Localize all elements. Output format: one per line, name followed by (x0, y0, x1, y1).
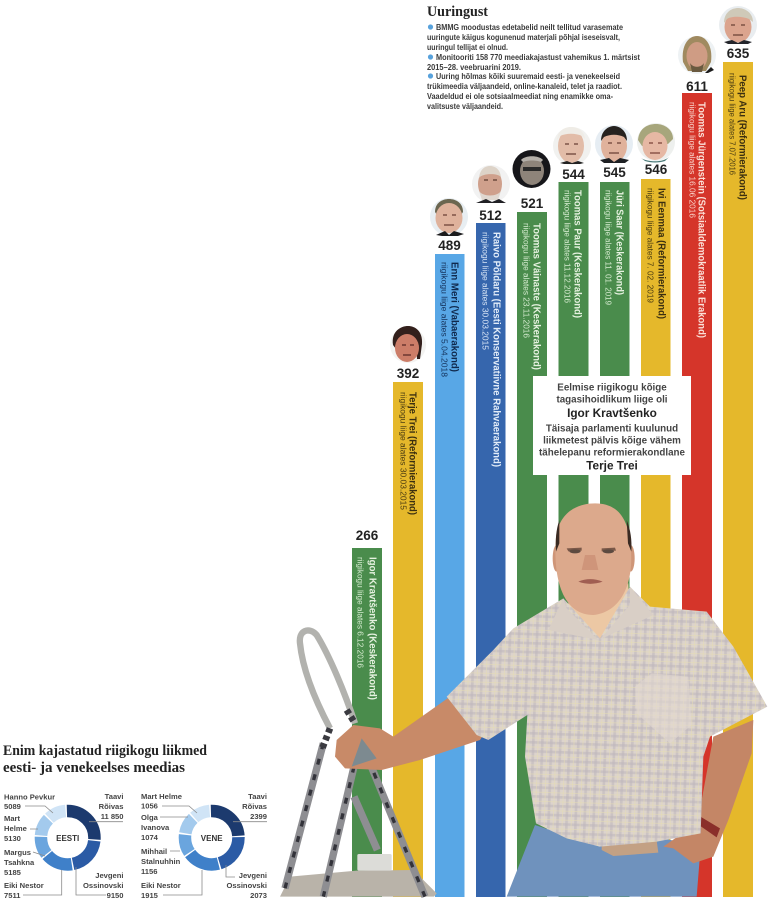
portrait: Enn Meri (430, 198, 468, 236)
heading: Uuringust: Uuringust (427, 4, 488, 20)
donut chart: Russian media: Stalnuhhin (141, 857, 181, 866)
neck (567, 583, 630, 640)
value: 521: 521 (521, 196, 544, 211)
bar: Terje Trei: Terje Trei (Reformierakond) (406, 392, 418, 515)
text block: Uuringust: trükimeedia väljaandeid, online-kanaleid, telet ja raadiot. (427, 82, 622, 91)
bar: Ivi Eenmaa: Ivi Eenmaa (Reformierakond) (656, 188, 666, 319)
donut chart: Russian media: 1915 (141, 891, 159, 900)
text block: Uuringust: BMMG moodustas edetabelid neilt tellitud varasemate (436, 23, 623, 32)
shirt pocket (635, 673, 692, 743)
bar: Enn Meri: riigikogu liige alates 5.04.2018 (440, 262, 448, 377)
donut chart: Estonian media: 5089 (4, 802, 21, 811)
head (553, 503, 635, 615)
donut chart: Estonian media: Margus (4, 848, 31, 857)
donut chart: Russian media: 1056 (141, 802, 158, 810)
donut chart: Estonian media: 5185 (4, 868, 22, 877)
donut chart: Russian media: Ossinovski (226, 881, 267, 890)
portrait: Peep Aru (719, 6, 757, 44)
donut chart: Russian media: Eiki Nestor (141, 881, 181, 890)
portrait: Raivo Põldaru (472, 165, 510, 203)
donut chart: Estonian media: Eiki Nestor (4, 881, 44, 890)
bar: Terje Trei: riigikogu liige alates 30.03.2015 (398, 392, 408, 510)
bar: Toomas Paur: Toomas Paur (Keskerakond) (572, 190, 582, 318)
donut chart: Estonian media: Helme (4, 824, 27, 833)
bar: Enn Meri (435, 254, 464, 897)
bar: Jüri Saar: Jüri Saar (Keskerakond) (614, 190, 624, 295)
right arm (663, 720, 753, 863)
donut chart: Estonian media: 9150 (107, 891, 124, 900)
value: 544: 544 (562, 167, 585, 182)
bar: Toomas Paur (558, 182, 588, 897)
portrait: Toomas Paur (553, 127, 591, 165)
watch (693, 813, 720, 837)
heading: most covered members: Enim kajastatud riigikogu liikmed (3, 743, 208, 759)
callout: Kravtšenko and Trei: Eelmise riigikogu kõige (557, 382, 667, 394)
bar: Igor Kravtšenko (352, 548, 382, 897)
bar: Jüri Saar (600, 182, 630, 897)
bar: Toomas Väinaste (517, 212, 547, 897)
text block: Uuringust: 2015–28. veebruarini 2019. (427, 63, 521, 72)
portrait: Toomas Väinaste (512, 150, 550, 188)
donut chart: Russian media: 2399 (250, 812, 267, 821)
donut chart: Russian media: Mihhail (141, 847, 167, 856)
belt (602, 841, 658, 856)
text block: Uuringust (427, 4, 640, 111)
bar: Jüri Saar: riigikogu liige alates 11. 01. 2019 (604, 190, 612, 305)
callout: Kravtšenko and Trei: liikmetest pälvis kõige vähem (543, 436, 681, 446)
heading: most covered members: eesti- ja venekeelses meedias (3, 760, 185, 776)
value: 266: 266 (356, 528, 379, 543)
text block: Uuringust: uuringute käigus kogunenud materjali põhjal iseseisvalt, (427, 33, 620, 42)
donut chart: Russian media: 1074 (141, 833, 159, 842)
donut chart: Russian media: Olga (141, 813, 159, 822)
bar: Igor Kravtšenko: riigikogu liige alates 6.12.2016 (356, 557, 364, 668)
value: 635: 635 (727, 46, 750, 61)
left arm (335, 697, 493, 770)
donut chart: Russian media: Mart Helme (141, 792, 182, 801)
bar: Igor Kravtšenko: Igor Kravtšenko (Keskerakond) (366, 557, 378, 700)
bar: Toomas Jürgenstein (682, 93, 712, 897)
bar: Enn Meri: Enn Meri (Vabaerakond) (448, 262, 460, 372)
heading: most covered members (3, 743, 208, 776)
bar: Raivo Põldaru: riigikogu liige alates 30.03.2015 (480, 232, 490, 350)
callout: Kravtšenko and Trei: tagasihoidlikum liige oli (556, 394, 668, 406)
stepladder (280, 630, 437, 897)
value: 545: 545 (603, 165, 626, 180)
donut chart: Russian media (141, 792, 267, 900)
bar: Ivi Eenmaa: riigikogu liige alates 7. 02. 2019 (646, 188, 654, 303)
donut chart: Russian media: VENE (201, 834, 223, 843)
donut chart: Estonian media: Tsahkna (4, 858, 35, 867)
callout: Kravtšenko and Trei: Täisaja parlamenti kuulunud (546, 424, 678, 434)
donut chart: Estonian media: 11 850 (101, 812, 124, 821)
text block: Uuringust: Vaadeldud ei ole sotsiaalmeediat ning enamikke oma- (427, 92, 613, 101)
donut chart: Estonian media: 5130 (4, 834, 21, 843)
bar: Toomas Väinaste: Toomas Väinaste (Keskerakond) (530, 223, 542, 370)
text block: Uuringust: Monitooriti 158 770 meediakajastust vahemikus 1. märtsist (436, 53, 640, 62)
donut chart: Estonian media: Hanno Pevkur (4, 792, 55, 802)
text block: Uuringust: Uuring hõlmas kõiki suuremaid eesti- ja venekeelseid (436, 72, 620, 81)
callout: Kravtšenko and Trei: tähelepanu reformierakondlane (539, 448, 686, 458)
bar: Peep Aru: Peep Aru (Reformierakond) (736, 75, 748, 200)
collar (548, 587, 653, 640)
text block: Uuringust: uuringul tellijat ei olnud. (427, 43, 508, 52)
bar: Peep Aru (723, 62, 753, 897)
portrait: Jüri Saar (595, 125, 633, 163)
bar: Toomas Väinaste: riigikogu liige alates 23.11.2016 (522, 223, 530, 338)
callout: Kravtšenko and Trei: Igor Kravtšenko (567, 406, 657, 420)
bar: Terje Trei (393, 382, 423, 897)
portrait: Terje Trei (390, 326, 426, 363)
text block: Uuringust: valitsuste väljaandeid. (427, 102, 503, 111)
shirt (447, 587, 767, 847)
bar: Raivo Põldaru (476, 223, 506, 897)
photo illustration: man with stepladder (280, 503, 767, 897)
donut chart: Estonian media: 7511 (4, 891, 21, 900)
donut chart: Russian media: Taavi (248, 792, 267, 801)
donut chart: Estonian media: Rõivas (99, 802, 124, 811)
jeans (507, 825, 701, 897)
donut chart: Estonian media: Taavi (105, 792, 124, 801)
value: 611: 611 (686, 79, 708, 94)
donut chart: Estonian media: Mart (4, 814, 21, 823)
portrait: Toomas Jürgenstein (678, 36, 716, 74)
value: 392: 392 (397, 366, 419, 381)
bar: Toomas Jürgenstein: riigikogu liige alates 16.06 2016 (688, 102, 696, 218)
donut chart: Russian media: 2073 (250, 891, 267, 900)
ladder joint over hand (352, 738, 377, 767)
donut chart: Russian media: Rõivas (242, 802, 267, 811)
donut chart: Estonian media (4, 792, 124, 900)
bar: Toomas Jürgenstein: Toomas Jürgenstein (Sotsiaaldemokraatlik Erakond) (696, 102, 706, 338)
donut chart: Estonian media: EESTI (56, 834, 79, 843)
callout: Kravtšenko and Trei: Terje Trei (586, 458, 638, 472)
donut chart: Estonian media: Jevgeni (95, 871, 124, 880)
bar: Ivi Eenmaa (641, 179, 670, 897)
callout: Kravtšenko and Trei (533, 376, 691, 475)
value: 489: 489 (438, 238, 461, 253)
donut chart: Russian media: Jevgeni (239, 871, 267, 880)
donut chart: Russian media: Ivanova (141, 823, 170, 832)
bar: Peep Aru: riigikogu liige alates 7.07.2016 (728, 73, 736, 175)
value: 512: 512 (479, 208, 502, 223)
value: 546: 546 (645, 162, 668, 177)
bar: Toomas Paur: riigikogu liige alates 11.12.2016 (562, 190, 572, 303)
donut chart: Estonian media: Ossinovski (83, 881, 124, 890)
portrait: Ivi Eenmaa (637, 123, 675, 162)
bar: Raivo Põldaru: Raivo Põldaru (Eesti Konservatiivne Rahvaerakond) (490, 232, 502, 467)
donut chart: Russian media: 1156 (141, 867, 157, 876)
